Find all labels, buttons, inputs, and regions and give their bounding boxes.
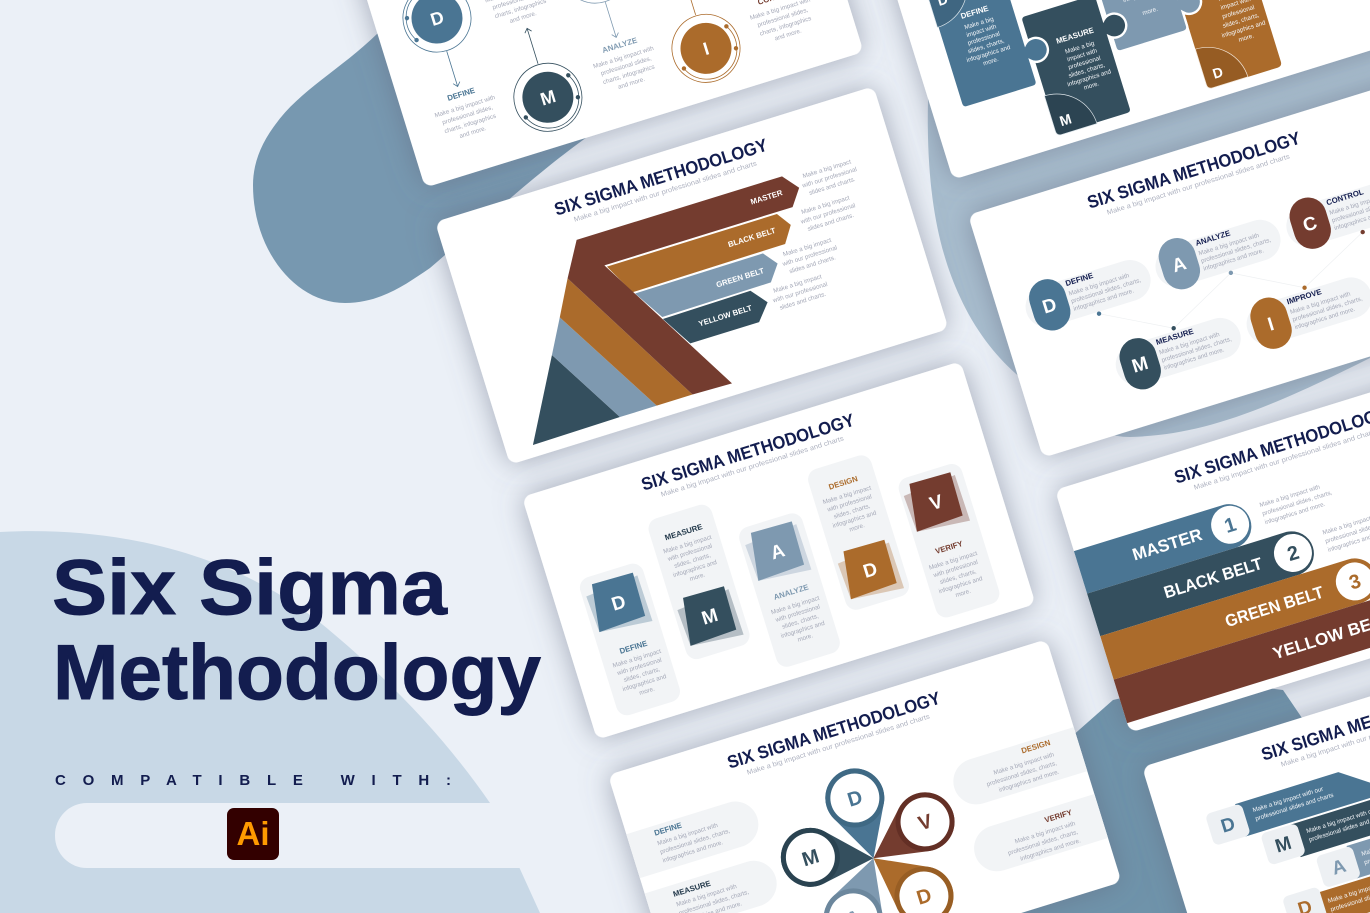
slide: puzzle: [878, 0, 1370, 180]
funnel bar: D: [1205, 761, 1370, 846]
subtitle: Make a big impact with our professional slides and charts: [660, 435, 845, 499]
petals: [753, 741, 994, 913]
puzzle piece: design: professional: [1221, 4, 1255, 21]
pyramid dark base: [509, 341, 620, 445]
slide: DMADV cards: [522, 361, 1036, 740]
text: define: and more.: [459, 125, 488, 140]
pill: analyze: infographics and more.: [1203, 247, 1265, 273]
capsule: verify: [968, 794, 1108, 877]
capsule: measure: [645, 855, 782, 913]
card: verify: Make a big impact: [928, 550, 978, 572]
petal: V: [848, 775, 975, 888]
step M circle: M: [538, 86, 558, 110]
card: design: Make a big impact: [822, 484, 872, 506]
funnel bar: A: A: [1329, 856, 1349, 880]
capsule: design: [948, 727, 1087, 810]
capsule: define: professional slides, charts,: [659, 828, 731, 856]
text: yellow belt: Make a big impact: [773, 273, 823, 295]
puzzle piece: analyze: [1081, 0, 1209, 53]
card: define: D: [609, 592, 629, 616]
text: define: DEFINE: [446, 86, 476, 103]
background blob: lower left: [0, 531, 540, 913]
pill: improve: I: [1265, 314, 1277, 336]
puzzle piece: define: Make a big: [964, 15, 995, 31]
pill: define: professional slides, charts,: [1070, 277, 1142, 305]
title: SIX SIGMA METHODOLOGY: [725, 688, 943, 773]
capsule: define: DEFINE: [653, 821, 683, 838]
text: green belt: Make a big impact: [782, 237, 832, 258]
slide: petal diagram: [608, 639, 1122, 913]
text: analyze: professional slides,: [600, 55, 653, 77]
pill: improve: [1240, 267, 1370, 355]
pill: analyze: A: [1170, 253, 1189, 277]
petal: M: M: [799, 845, 822, 871]
capsule: verify: Make a big impact with: [1014, 820, 1077, 845]
card: design: with professional: [826, 493, 873, 514]
text: yellow belt: slides and charts.: [779, 291, 827, 312]
pill: define: DEFINE: [1064, 271, 1094, 288]
funnel bar: D: Make a big impact with our: [1252, 786, 1324, 814]
pill: control: [1279, 167, 1370, 255]
text: master: [798, 158, 860, 198]
card: verify: V: [927, 491, 946, 515]
step D circle: [394, 0, 480, 61]
puzzle piece: analyze: more.: [1142, 6, 1159, 17]
pill: define: [1019, 249, 1157, 337]
pill: control: C: [1301, 213, 1320, 237]
card: define: DEFINE: [618, 639, 648, 656]
icon: Adobe Illustrator: Ai: [236, 815, 270, 852]
bar: black belt: [1087, 526, 1319, 636]
text: step 1: infographics and more.: [1264, 501, 1327, 526]
card: analyze: more.: [797, 632, 814, 644]
funnel bar: M: M: [1273, 833, 1294, 858]
card: verify: slides, charts,: [939, 568, 978, 586]
slide: pills network: [968, 79, 1370, 458]
main title: Methodology: [53, 628, 541, 716]
pill: improve: Make a big impact with: [1289, 290, 1352, 316]
puzzle piece: define: more.: [982, 56, 1000, 67]
card: measure: more.: [689, 571, 706, 583]
text: analyze: ANALYZE: [601, 36, 638, 55]
step I circle: [663, 6, 749, 91]
text: measure: [480, 0, 555, 30]
puzzle piece: define: impact with: [966, 23, 998, 39]
text: analyze: and more.: [617, 76, 646, 91]
background blob: right circle: [928, 40, 1370, 437]
card: analyze: slides, charts,: [781, 613, 820, 631]
slide: belt pyramid: [435, 86, 949, 465]
pill: measure: [1109, 308, 1248, 396]
pyramid orange strip: [549, 253, 693, 425]
text: black belt: [796, 194, 859, 234]
bar: master: MASTER: [1130, 525, 1204, 564]
ribbon: yellow belt: YELLOW BELT: [697, 303, 753, 328]
card: define: with professional: [615, 657, 663, 677]
text: step 2: [1322, 508, 1370, 554]
card: define: infographics and: [622, 673, 668, 693]
text: green belt: slides and charts.: [788, 254, 837, 275]
puzzle piece: define: professional: [967, 30, 1001, 47]
compatibility pill: [55, 803, 560, 868]
text: define: Make a big impact with: [434, 94, 497, 119]
card: verify: with professional: [932, 559, 979, 579]
text: green belt: [778, 236, 841, 277]
bar: black belt: 2: [1285, 542, 1302, 566]
card: analyze: Make a big impact: [770, 595, 821, 616]
pill: improve: infographics and more.: [1294, 306, 1356, 331]
text: black belt: slides and charts.: [807, 212, 855, 233]
ribbon: yellow belt: [663, 287, 772, 349]
puzzle piece: measure: slides, charts,: [1068, 62, 1106, 80]
card: verify: VERIFY: [934, 539, 965, 556]
card: design: D: [861, 559, 880, 583]
puzzle piece: measure: M: [1057, 110, 1073, 129]
puzzle piece: design: [1171, 0, 1282, 89]
title: SIX SIGMA METHODOLOGY: [552, 135, 770, 220]
pill: define: D: [1040, 294, 1059, 318]
text: black belt: with our professional: [799, 202, 856, 226]
card: measure: MEASURE: [664, 522, 704, 542]
puzzle piece: measure: Make a big: [1064, 40, 1096, 56]
text: control: professional slides,: [757, 7, 809, 29]
funnel bar: D lower: [1282, 835, 1370, 913]
petal: A: [794, 835, 924, 913]
funnel bar: A: [1315, 808, 1370, 888]
card: verify: more.: [955, 588, 972, 599]
pill: analyze: Make a big impact with: [1198, 232, 1261, 257]
card: analyze: A: [768, 540, 788, 564]
puzzle piece: define: DEFINE: [960, 4, 990, 21]
card: design: DESIGN: [828, 474, 859, 492]
card: measure: Make a big impact: [662, 534, 713, 555]
puzzle piece: design: more.: [1238, 32, 1255, 44]
ribbon: black belt: BLACK BELT: [727, 226, 777, 249]
pill: improve: IMPROVE: [1286, 287, 1323, 306]
ribbon: green belt: [635, 250, 783, 323]
text: master: Make a big impact: [802, 158, 852, 180]
puzzle piece: define: slides, charts,: [967, 37, 1006, 55]
text: measure: and more.: [509, 10, 538, 25]
pill: measure: M: [1129, 353, 1151, 378]
main title: Six Sigma: [52, 543, 448, 631]
card: measure: with professional: [666, 543, 713, 563]
card: measure: [646, 502, 752, 662]
capsule: design: Make a big impact with: [993, 751, 1056, 777]
ribbon: black belt: [607, 211, 796, 297]
pill: define: Make a big impact with: [1068, 272, 1131, 298]
card: define: Make a big impact: [612, 648, 662, 670]
text: step 1: Make a big impact with: [1259, 484, 1321, 509]
text: define: charts, infographics: [444, 113, 497, 135]
pill: analyze: [1148, 208, 1287, 296]
ribbon: master and brown strip: [558, 172, 849, 421]
card: design: infographics and: [832, 509, 878, 530]
bar: black belt: BLACK BELT: [1162, 554, 1265, 602]
text: green belt: with our professional: [781, 244, 838, 268]
capsule: define: [626, 796, 764, 878]
capsule: design: DESIGN: [1020, 738, 1052, 755]
puzzle piece: measure: more.: [1083, 80, 1100, 92]
petal: D: [818, 761, 902, 867]
capsule: measure: Make a big impact with: [675, 883, 738, 908]
text: yellow belt: [768, 272, 831, 313]
card: design: [805, 453, 912, 613]
petal: M: [764, 801, 890, 913]
slide: funnel bars: [1142, 631, 1370, 913]
background blob: upper left: [253, 0, 590, 303]
connector lines: [1099, 232, 1370, 348]
compatible with label: COMPATIBLE WITH:: [55, 772, 451, 789]
text: analyze: [588, 31, 663, 96]
funnel bar: M: [1260, 771, 1370, 867]
text: analyze: Make a big impact with: [592, 45, 655, 70]
main title: [52, 543, 541, 716]
capsule: verify: professional slides, charts,: [1007, 829, 1079, 857]
pill: analyze: professional slides, charts,: [1200, 237, 1272, 265]
petal: D lower: D: [914, 884, 934, 910]
pill: measure: Make a big impact with: [1158, 331, 1221, 356]
text: control: [745, 0, 820, 48]
pill: control: CONTROL: [1325, 187, 1365, 207]
card: verify: [896, 461, 1002, 620]
text: master: slides and charts.: [808, 176, 857, 197]
text: control: charts, infographics: [759, 15, 812, 38]
puzzle piece: design: slides, charts,: [1222, 12, 1260, 30]
arrows between steps: [443, 0, 696, 89]
slide: numbered bars: [1055, 354, 1370, 733]
text: analyze: charts, infographics: [602, 64, 656, 86]
funnel bar: D: professional slides and charts: [1254, 792, 1334, 823]
slide: circle steps: [350, 0, 864, 188]
capsule: verify: infographics and more.: [1019, 837, 1082, 863]
pill: improve: professional slides, charts,: [1292, 295, 1364, 324]
petal: D: D: [845, 786, 865, 812]
puzzle piece: measure: professional: [1068, 55, 1101, 71]
subtitle: Make a big impact with our professional slides and charts: [1106, 153, 1291, 217]
title: SIX SIGMA METHODOLOGY: [639, 410, 857, 495]
card: measure: infographics and: [672, 559, 718, 579]
puzzle piece: define: [925, 0, 1058, 109]
funnel bar: D: D: [1219, 814, 1238, 838]
card: define: more.: [638, 685, 656, 697]
capsule: measure: MEASURE: [672, 879, 712, 899]
bar: green belt: GREEN BELT: [1223, 583, 1326, 631]
card: define: slides, charts,: [623, 666, 661, 684]
step D circle: D: [428, 7, 446, 30]
bar: green belt: [1100, 553, 1370, 680]
text: step 1: [1259, 481, 1336, 526]
puzzle piece: define: infographics and: [966, 44, 1012, 64]
text: black belt: Make a big impact: [800, 194, 851, 216]
puzzle piece: measure: [1020, 0, 1152, 136]
step I circle: I: [701, 39, 711, 59]
puzzle piece: measure: impact with: [1066, 47, 1098, 63]
card: verify: infographics and: [938, 575, 984, 595]
icon: Adobe Illustrator: [227, 808, 279, 860]
capsule: design: professional slides, charts,: [986, 760, 1058, 788]
petal: D lower: [846, 818, 976, 913]
card: analyze: ANALYZE: [773, 583, 810, 602]
subtitle: Make a big impact with our professional slides and charts: [573, 160, 758, 224]
card: analyze: [736, 511, 843, 670]
puzzle piece: design: D: [1211, 63, 1225, 82]
ribbon: master and brown strip: MASTER: [749, 188, 784, 207]
capsule: define: Make a big impact with: [657, 822, 719, 847]
capsule: verify: VERIFY: [1043, 808, 1074, 825]
ribbon: green belt: GREEN BELT: [715, 266, 765, 289]
card: define: [577, 561, 683, 718]
puzzle piece: design: infographics and: [1221, 19, 1267, 40]
text: master: with our professional: [800, 166, 858, 190]
pill: measure: professional slides, charts,: [1161, 336, 1233, 364]
bar: green belt: 3: [1347, 570, 1364, 595]
card: analyze: infographics and: [780, 620, 826, 640]
text: define: professional slides,: [441, 104, 494, 126]
text: define: [430, 81, 505, 145]
pill: define: infographics and more.: [1073, 287, 1135, 313]
subtitle: Make a big impact with our professional slides and charts: [746, 713, 931, 777]
pill: measure: MEASURE: [1155, 327, 1195, 347]
capsule: define: infographics and more.: [662, 839, 724, 864]
petal: V: V: [916, 810, 936, 835]
bar: yellow belt: [1114, 581, 1370, 723]
puzzle piece: measure: infographics and: [1067, 68, 1113, 88]
pyramid blue strip: [542, 298, 657, 431]
card: measure: slides, charts,: [673, 552, 712, 570]
card: analyze: with professional: [774, 603, 821, 624]
pill: analyze: ANALYZE: [1194, 228, 1231, 248]
subtitle: Make a big impact with our professional slides and charts: [1193, 428, 1370, 492]
bar: master: [1074, 499, 1257, 594]
bar: master: 1: [1222, 514, 1239, 538]
pill: measure: infographics and more.: [1163, 346, 1226, 372]
text: control: and more.: [774, 27, 803, 42]
card: measure: M: [699, 605, 721, 630]
puzzle piece: measure: MEASURE: [1055, 26, 1095, 46]
text: yellow belt: with our professional: [771, 281, 828, 305]
text: step 1: professional slides, charts,: [1261, 489, 1333, 518]
step A circle: [553, 0, 638, 12]
step M circle: [505, 55, 590, 140]
background blob: lower right: [1000, 680, 1302, 913]
card: design: slides, charts,: [833, 503, 871, 520]
title: SIX SIGMA METHODOLOGY: [1085, 128, 1303, 213]
card: design: more.: [848, 522, 866, 533]
capsule: design: infographics and more.: [998, 768, 1061, 794]
